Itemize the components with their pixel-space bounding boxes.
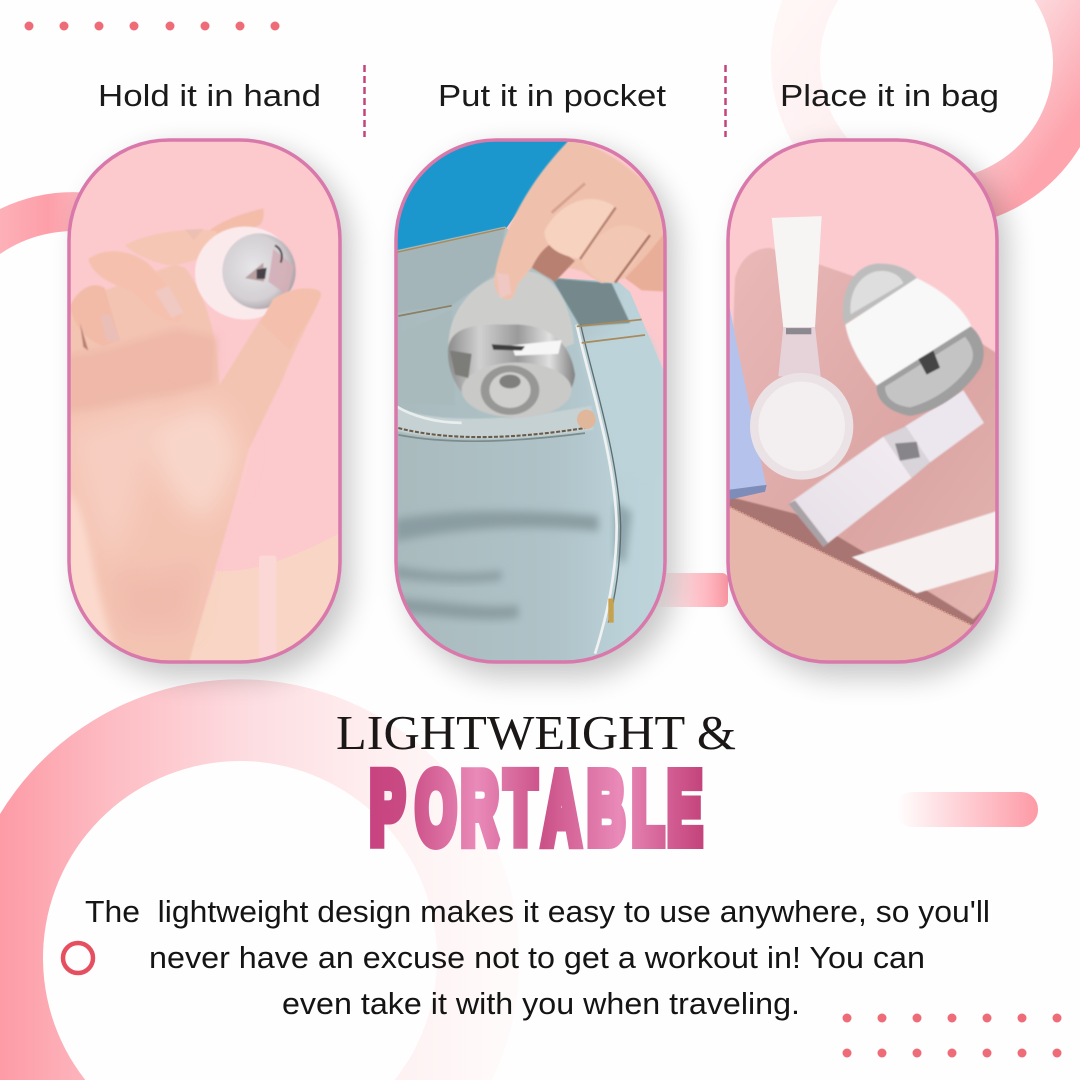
device in hand [195,226,296,319]
panel: hold it in hand [60,130,350,671]
blue bottle [730,307,767,500]
accent pill: between panels [655,573,728,607]
jeans [392,226,668,671]
shoulder and strap [190,534,338,660]
dot grid: bottom right [842,1014,1062,1058]
caption: hold it in hand: Hold it in hand [98,78,321,113]
accent ring [63,943,93,973]
decorative ring: left [0,192,90,254]
panel shadows [80,148,1008,678]
device in pocket [448,271,575,418]
hand [60,209,321,671]
body text [85,894,990,1021]
bag front flap [730,506,972,660]
white tube [772,216,822,376]
body text: never have an excuse not to get a workout in! You can [149,940,925,975]
panel: put it in pocket [385,130,675,671]
title: portable: PORTABLE [370,752,702,864]
decorative ring: bottom left [0,679,519,1080]
title: lightweight and: LIGHTWEIGHT & [336,705,736,760]
round compact [750,373,853,480]
blue shirt [398,142,568,250]
panel: place it in bag [720,130,1010,674]
body text: even take it with you when traveling. [282,986,800,1021]
device in bag [843,264,984,416]
body text: The lightweight design makes it easy to use anywhere, so you'll [85,894,990,929]
lipstick bottle [788,390,984,547]
accent pill: right [895,792,1038,827]
hand with fingers [494,140,672,299]
decorative ring: top right [771,0,1080,228]
white bottle [852,509,1003,593]
divider: second [724,65,727,137]
caption: place it in bag: Place it in bag [780,78,999,113]
bag interior [727,248,1003,630]
divider: first [363,65,366,137]
caption: put it in pocket: Put it in pocket [438,78,666,113]
thumb tip [263,288,321,317]
dot row: top left [24,22,280,30]
